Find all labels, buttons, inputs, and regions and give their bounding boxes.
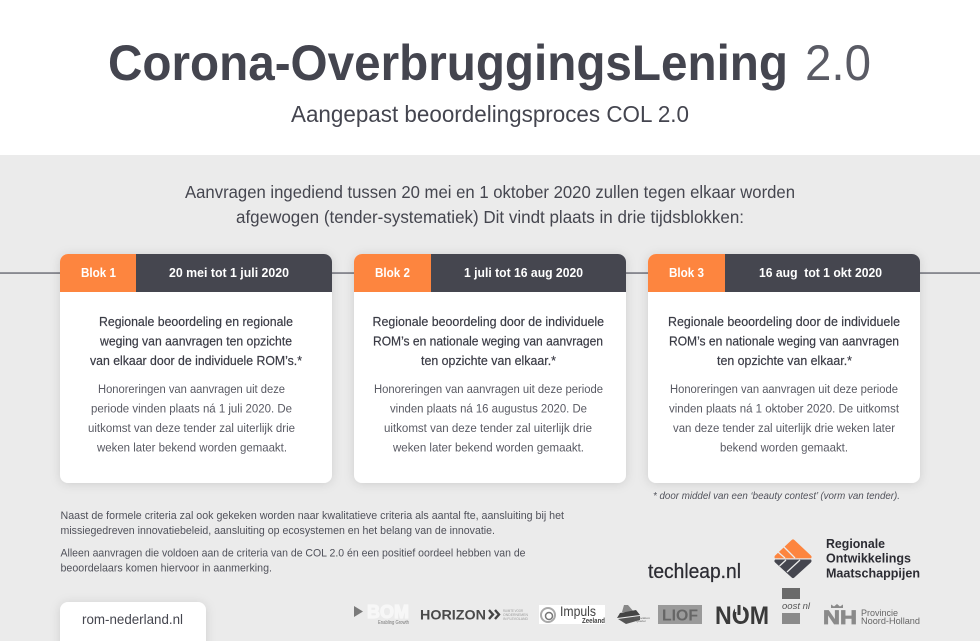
header: blok 3 label [648, 254, 725, 292]
intro text: afgewogen (tender-systematiek) Dit vindt plaats in drie tijdsblokken: [236, 207, 744, 227]
logo: regionale ontwikkelings maatschappijen: Ontwikkelings [826, 550, 911, 566]
header: blok 3 label: Blok 3 [669, 265, 704, 280]
logo: LIOF: LIOF [662, 608, 698, 624]
blok 2 body text: Honoreringen van aanvragen uit deze periode [374, 382, 603, 396]
blok 1 heading text [90, 314, 302, 368]
blok 2 heading text: ten opzichte van elkaar.* [421, 353, 556, 368]
footnote: * door middel van een ‘beauty contest’ (vorm van tender). [653, 491, 900, 502]
criteria text [60, 510, 564, 574]
blok 3 body text: Honoreringen van aanvragen uit deze periode [670, 382, 898, 396]
logo: oost.nl: oost nl [782, 601, 811, 612]
logo: BOM: Enabling Growth [378, 620, 409, 626]
header: blok 1 label [60, 254, 136, 292]
header: blok 2 label: Blok 2 [375, 265, 410, 280]
header: blok 3 date: 16 aug tot 1 okt 2020 [759, 265, 882, 280]
criteria text: Alleen aanvragen die voldoen aan de criteria van de COL 2.0 én een positief oordeel hebben van de [60, 548, 526, 560]
timeline line [0, 272, 980, 274]
panel: blok 2 [354, 254, 626, 483]
header: blok 1 date: 20 mei tot 1 juli 2020 [169, 265, 289, 280]
logo: Impuls Zeeland: Impuls [560, 603, 596, 619]
header: blok 2 date [431, 254, 626, 292]
header: blok 1 label: Blok 1 [81, 265, 116, 280]
blok 1 body text [88, 382, 295, 454]
grey content panel [0, 155, 980, 641]
blok 1 body text: periode vinden plaats ná 1 juli 2020. De [91, 402, 292, 416]
blok 1 body text: weken later bekend worden gemaakt. [96, 440, 287, 454]
logo: regionale ontwikkelings maatschappijen: Regionale [826, 536, 885, 551]
header: blok 3 date [725, 254, 920, 292]
blok 2 heading text: Regionale beoordeling door de individuele [372, 314, 604, 329]
website pill: rom-nederland.nl [82, 612, 183, 627]
intro text: Aanvragen ingediend tussen 20 mei en 1 oktober 2020 zullen tegen elkaar worden [185, 182, 795, 202]
blok 2 body text: vinden plaats ná 16 augustus 2020. De [390, 402, 587, 416]
logo: BOM: BOM [367, 602, 409, 622]
criteria text: beoordelaars komen hiervoor in aanmerking. [60, 562, 272, 574]
blok 3 heading text [668, 314, 900, 368]
title: 2.0 [805, 35, 871, 91]
logo: Innovation Quarter: Quarter [636, 619, 646, 623]
blok 2 body text: weken later bekend worden gemaakt. [392, 440, 584, 454]
logo: Innovation Quarter: Innovation [634, 616, 650, 620]
logo: Innovation Quarter [617, 605, 650, 624]
logo: Horizon: RUIMTE VOOR [503, 609, 523, 613]
blok 3 heading text: ten opzichte van elkaar.* [717, 353, 852, 368]
criteria text: Naast de formele criteria zal ook gekeken worden naar kwalitatieve criteria als aantal fte, aansluiting bij het [60, 510, 564, 522]
logo: Horizon: IN FLEVOLAND [503, 617, 528, 621]
blok 3 body text [669, 382, 900, 454]
blok 3 body text: bekend worden gemaakt. [720, 440, 848, 454]
logo: oost.nl [782, 588, 811, 624]
logo: Provincie Noord-Holland [823, 604, 920, 629]
criteria text: missiegedreven innovatiebeleid, aansluiting op ecosystemen en het belang van de innovatie. [60, 525, 495, 537]
logo: techleap.nl: techleap.nl [648, 561, 741, 583]
blok 2 body text: uitkomst van deze tender zal uiterlijk drie [384, 421, 592, 435]
blok 3 body text: vinden plaats ná 1 oktober 2020. De uitkomst [669, 402, 900, 416]
title: Corona-OverbruggingsLening [108, 35, 788, 91]
logo: NOM: NOM [715, 602, 769, 630]
intro text [185, 182, 795, 227]
blok 1 heading text: Regionale beoordeling en regionale [99, 314, 293, 329]
panel: blok 1 [60, 254, 332, 483]
logo: Provincie Noord-Holland: Noord-Holland [861, 616, 920, 627]
blok 3 body text: van deze tender zal uiterlijk drie weken later [673, 421, 895, 435]
blok 2 body text [374, 382, 603, 454]
blok 2 heading text [372, 314, 604, 368]
header: blok 1 date [136, 254, 332, 292]
logo: BOM [354, 602, 409, 626]
logo: Impuls Zeeland [539, 603, 605, 625]
logo: Impuls Zeeland: Zeeland [582, 616, 605, 625]
logo: Horizon [420, 606, 528, 622]
logo: Horizon: ONDERNEMEN [503, 613, 528, 617]
blok 2 heading text: ROM’s en nationale weging van aanvragen [373, 334, 603, 348]
blok 3 heading text: ROM’s en nationale weging van aanvragen [669, 334, 899, 348]
logo: regionale ontwikkelings maatschappijen [773, 536, 920, 580]
blok 1 body text: Honoreringen van aanvragen uit deze [98, 382, 285, 396]
blok 3 heading text: Regionale beoordeling door de individuele [668, 314, 900, 329]
blok 1 body text: uitkomst van deze tender zal uiterlijk drie [88, 421, 295, 435]
website pill [60, 602, 206, 641]
panel: blok 3 [648, 254, 920, 483]
logo: Provincie Noord-Holland: NH [823, 608, 857, 629]
logo: Provincie Noord-Holland: Provincie [861, 608, 898, 619]
subtitle: Aangepast beoordelingsproces COL 2.0 [291, 101, 689, 127]
blok 1 heading text: weging van aanvragen ten opzichte [99, 334, 292, 348]
logo: Horizon: HORIZON [420, 606, 486, 622]
header: blok 2 date: 1 juli tot 16 aug 2020 [464, 265, 583, 280]
logo: regionale ontwikkelings maatschappijen: Maatschappijen [826, 566, 920, 580]
blok 1 heading text: van elkaar door de individuele ROM’s.* [90, 353, 302, 368]
header: blok 2 label [354, 254, 431, 292]
